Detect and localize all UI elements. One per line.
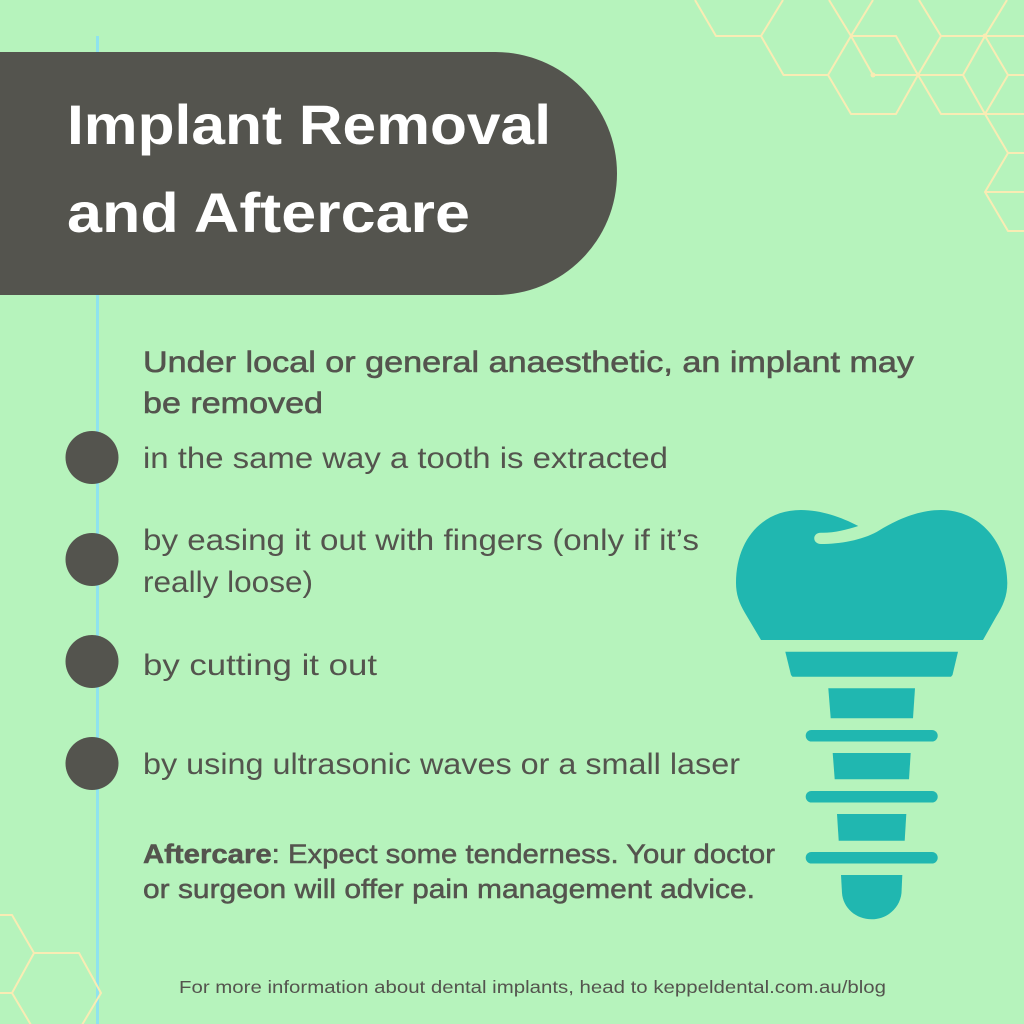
title text bbox=[67, 93, 551, 244]
intro text bbox=[143, 346, 914, 420]
bullet 2: by easing it out with fingers (only if it’s bbox=[143, 524, 699, 557]
bullet 3 bbox=[66, 635, 378, 688]
intro text: be removed bbox=[143, 387, 323, 420]
title banner bbox=[0, 52, 617, 295]
aftercare note bbox=[143, 839, 775, 904]
bullet 3: by cutting it out bbox=[143, 649, 378, 682]
bullet 1: in the same way a tooth is extracted bbox=[143, 442, 668, 475]
aftercare note: Aftercare : Expect some tenderness. Your doctor bbox=[143, 839, 775, 869]
title text: Implant Removal bbox=[67, 93, 551, 156]
bullet 2: really loose) bbox=[143, 566, 313, 599]
icon: dental implant bbox=[736, 510, 1007, 919]
implant collar bbox=[785, 652, 958, 677]
bullet 4: by using ultrasonic waves or a small laser bbox=[143, 748, 740, 781]
bullet 1 bbox=[66, 431, 668, 484]
bullet 2 bbox=[66, 524, 699, 599]
aftercare note: or surgeon will offer pain management advice. bbox=[143, 874, 755, 904]
title text: and Aftercare bbox=[67, 181, 470, 244]
implant tip bbox=[841, 875, 902, 919]
footer: For more information about dental implants, head to keppeldental.com.au/blog bbox=[179, 977, 886, 997]
implant screw segments bbox=[828, 688, 915, 718]
implant crown bbox=[736, 510, 1007, 640]
intro text: Under local or general anaesthetic, an implant may bbox=[143, 346, 914, 379]
bullet 4 bbox=[66, 737, 740, 790]
